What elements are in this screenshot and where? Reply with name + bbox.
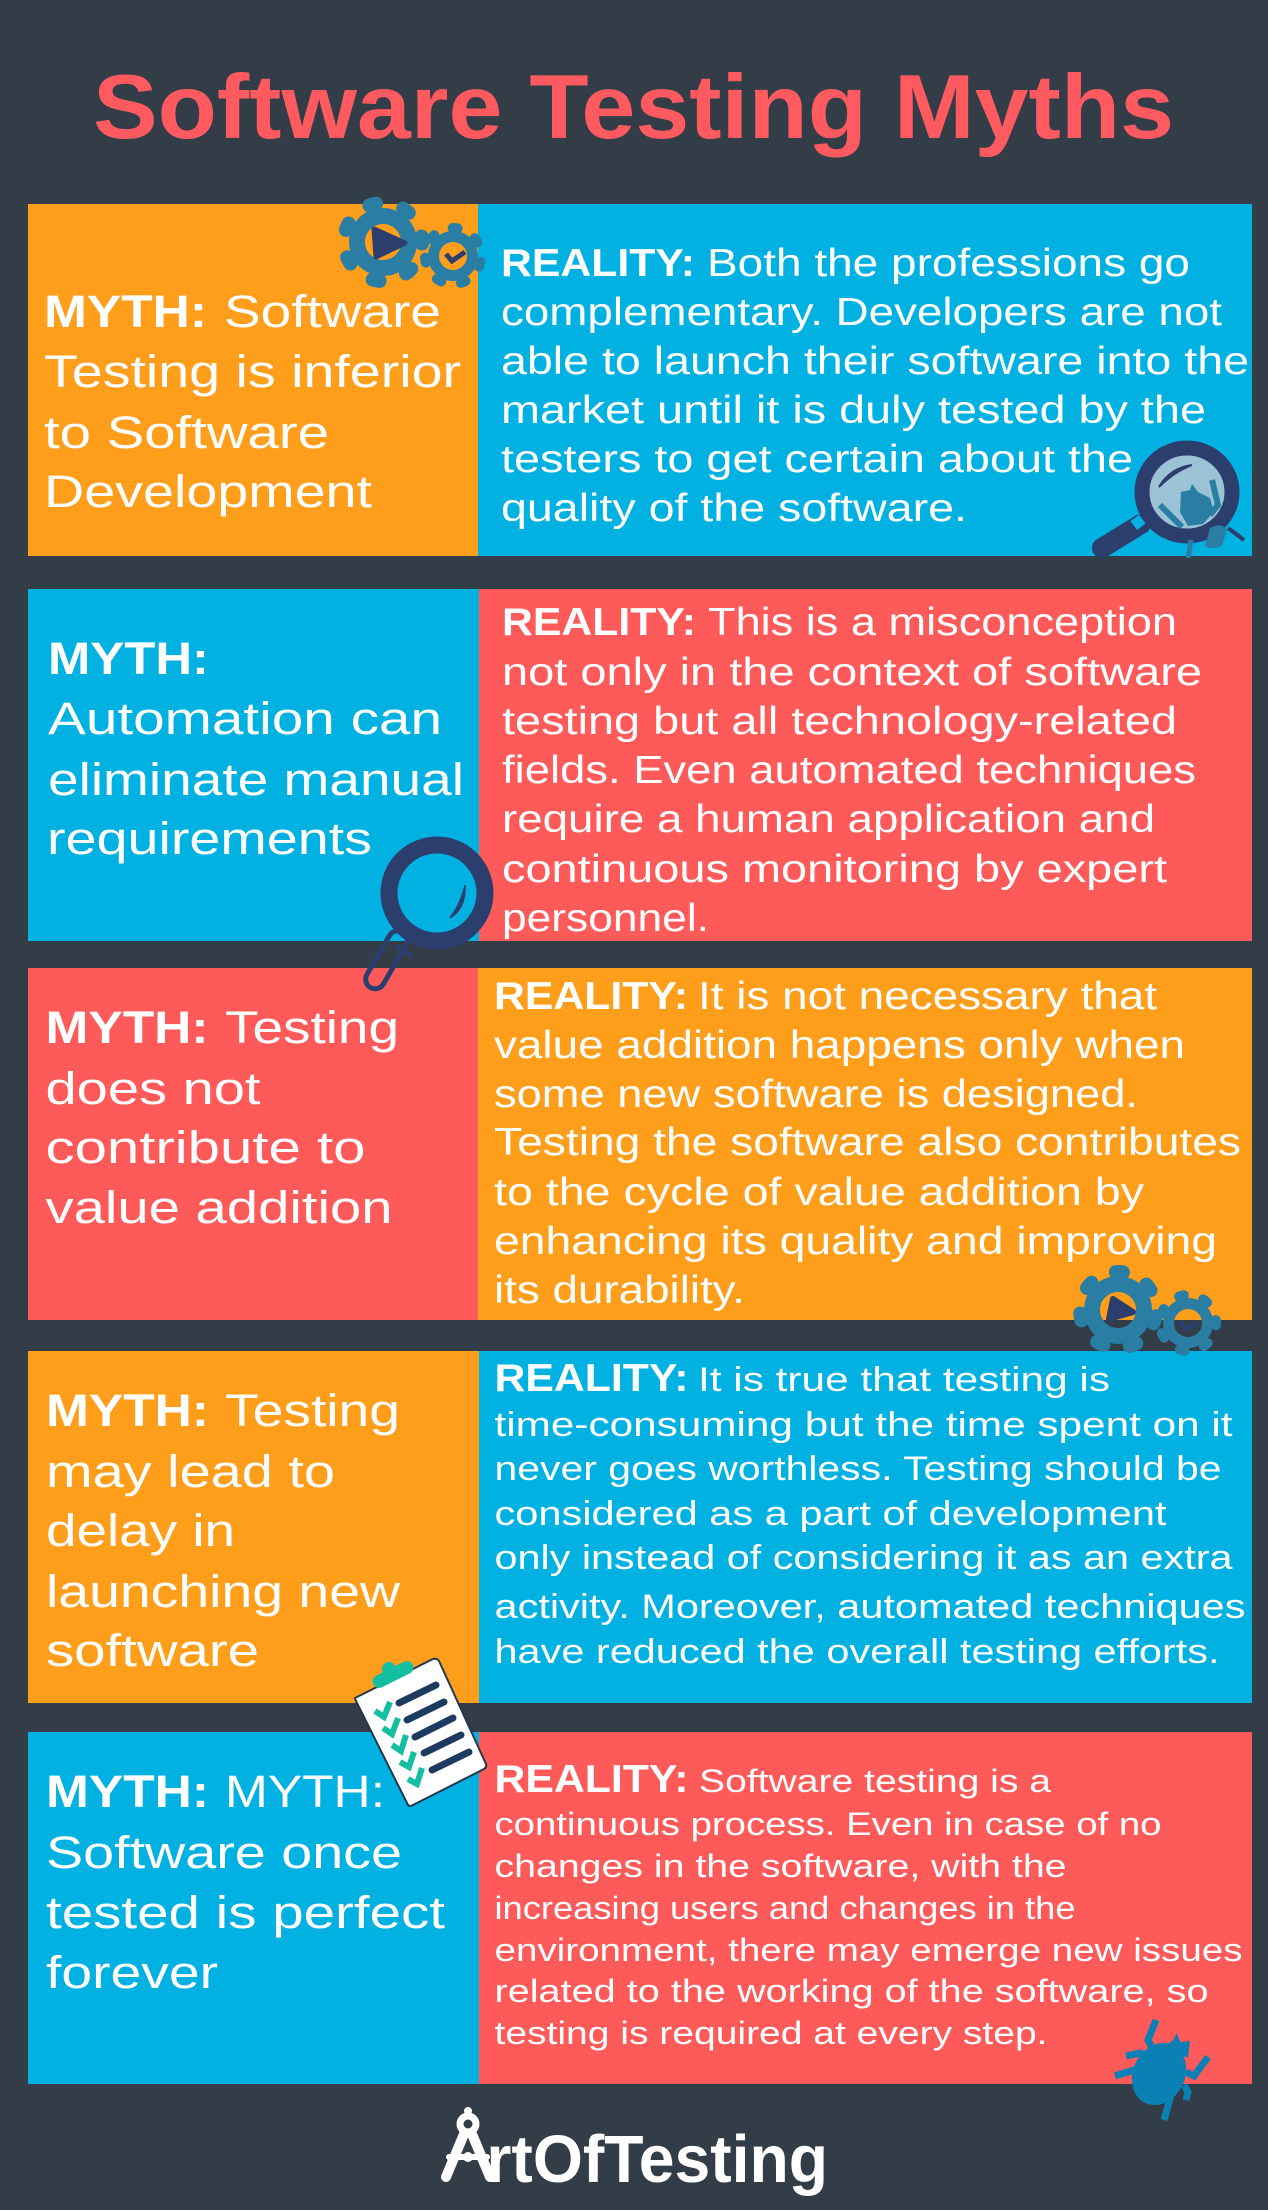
panel: row 4 reality: It is true that testing is bbox=[698, 1361, 1110, 1399]
panel: row 1 reality: quality of the software. bbox=[501, 487, 967, 530]
panel: row 5 reality: changes in the software, with the bbox=[494, 1848, 1066, 1884]
panel: row 3 reality: its durability. bbox=[494, 1269, 745, 1312]
icon: clipboard bbox=[355, 1659, 486, 1806]
panel: row 1 reality: market until it is duly tested by the bbox=[501, 389, 1206, 432]
panel: row 4 reality: considered as a part of development bbox=[494, 1495, 1167, 1533]
panel: row 3 reality: enhancing its quality and improving bbox=[494, 1220, 1217, 1263]
panel: row 4 myth: Testing bbox=[225, 1385, 400, 1436]
panel: row 3 reality: Testing the software also contributes bbox=[494, 1121, 1241, 1164]
panel: row 1 myth: Testing is inferior bbox=[44, 346, 461, 397]
panel: row 5 myth bbox=[28, 1732, 479, 2084]
panel: row 2 myth: requirements bbox=[47, 813, 372, 864]
title: Software Testing Myths bbox=[93, 57, 1174, 158]
panel: row 4 myth: launching new bbox=[46, 1566, 401, 1617]
panel: row 5 reality: Software testing is a bbox=[699, 1763, 1051, 1799]
panel: row 4 myth: may lead to bbox=[46, 1446, 335, 1497]
panel: row 5 myth: MYTH: bbox=[46, 1766, 209, 1817]
panel: row 3 reality: value addition happens only when bbox=[494, 1024, 1185, 1067]
panel: row 1 reality: testers to get certain about the bbox=[501, 438, 1133, 481]
panel: row 2 reality: testing but all technology-related bbox=[502, 700, 1177, 743]
panel: row 1 myth: to Software bbox=[44, 407, 329, 458]
panel: row 5 reality: increasing users and changes in the bbox=[494, 1890, 1076, 1926]
panel: row 4 myth bbox=[28, 1351, 479, 1703]
panel: row 4 myth: MYTH: bbox=[46, 1385, 209, 1436]
panel: row 3 reality: some new software is designed. bbox=[494, 1073, 1138, 1116]
panel: row 5 myth: tested is perfect bbox=[46, 1887, 446, 1938]
panel: row 5 myth: Software once bbox=[46, 1827, 402, 1878]
panel: row 4 reality bbox=[479, 1351, 1252, 1703]
panel: row 1 myth: Development bbox=[44, 466, 373, 517]
panel: row 3 myth bbox=[28, 968, 479, 1320]
panel: row 1 reality: able to launch their software into the bbox=[501, 340, 1249, 383]
panel: row 3 myth: does not bbox=[46, 1063, 261, 1114]
panel: row 2 myth: MYTH: bbox=[48, 633, 209, 684]
panel: row 2 reality: require a human application and bbox=[502, 798, 1155, 841]
panel: row 2 myth: Automation can bbox=[48, 693, 442, 744]
panel: row 1 myth: Software bbox=[224, 286, 441, 337]
panel: row 4 reality: only instead of considering it as an extra bbox=[494, 1539, 1233, 1577]
panel: row 5 myth: MYTH: bbox=[225, 1766, 385, 1817]
panel: row 2 reality: personnel. bbox=[502, 897, 709, 940]
panel: row 3 myth: Testing bbox=[225, 1002, 399, 1053]
panel: row 1 reality: REALITY: bbox=[501, 242, 695, 285]
panel: row 4 reality: REALITY: bbox=[494, 1357, 688, 1400]
panel: row 3 myth: contribute to bbox=[46, 1122, 366, 1173]
panel: row 4 myth: software bbox=[46, 1625, 259, 1676]
panel: row 5 reality bbox=[479, 1732, 1252, 2084]
panel: row 4 reality: have reduced the overall testing efforts. bbox=[494, 1633, 1220, 1671]
panel: row 4 myth: delay in bbox=[46, 1505, 235, 1556]
icon: magnifier with bug row 1 bbox=[1102, 448, 1244, 558]
panel: row 4 reality: time-consuming but the time spent on it bbox=[494, 1406, 1233, 1444]
icon: bug bbox=[1115, 2020, 1208, 2120]
panel: row 3 myth: value addition bbox=[46, 1182, 392, 1233]
panel: row 2 reality: fields. Even automated techniques bbox=[502, 749, 1196, 792]
panel: row 2 reality bbox=[479, 589, 1252, 941]
panel: row 4 reality: activity. Moreover, automated techniques bbox=[494, 1588, 1246, 1626]
panel: row 1 myth bbox=[28, 204, 479, 556]
panel: row 3 reality bbox=[478, 968, 1252, 1320]
panel: row 2 myth bbox=[28, 589, 479, 941]
panel: row 5 reality: testing is required at every step. bbox=[494, 2015, 1048, 2051]
panel: row 5 reality: REALITY: bbox=[494, 1758, 688, 1801]
panel: row 2 reality: This is a misconception bbox=[708, 601, 1177, 644]
panel: row 3 reality: REALITY: bbox=[494, 975, 688, 1018]
panel: row 5 reality: related to the working of the software, so bbox=[494, 1973, 1208, 2009]
panel: row 1 reality: Both the professions go bbox=[707, 242, 1190, 285]
panel: row 3 myth: MYTH: bbox=[46, 1002, 208, 1053]
panel: row 1 myth: MYTH: bbox=[44, 286, 207, 337]
panel: row 3 reality: It is not necessary that bbox=[698, 975, 1157, 1018]
panel: row 4 reality: never goes worthless. Testing should be bbox=[494, 1450, 1222, 1488]
panel: row 2 reality: continuous monitoring by expert bbox=[502, 848, 1167, 891]
panel: row 5 reality: environment, there may emerge new issues bbox=[494, 1932, 1242, 1968]
panel: row 1 reality bbox=[478, 204, 1252, 556]
panel: row 1 reality: complementary. Developers are not bbox=[501, 291, 1222, 334]
icon: magnifier row 2 bbox=[362, 845, 485, 992]
icon: gears row 3 bbox=[1074, 1266, 1219, 1354]
panel: row 5 myth: forever bbox=[46, 1947, 218, 1998]
panel: row 3 reality: to the cycle of value addition by bbox=[494, 1171, 1145, 1214]
panel: row 5 reality: continuous process. Even in case of no bbox=[494, 1806, 1162, 1842]
panel: row 2 reality: not only in the context of software bbox=[502, 651, 1202, 694]
panel: row 2 reality: REALITY: bbox=[502, 601, 696, 644]
icon: gears row 1 bbox=[339, 198, 486, 289]
panel: row 2 myth: eliminate manual bbox=[48, 754, 464, 805]
